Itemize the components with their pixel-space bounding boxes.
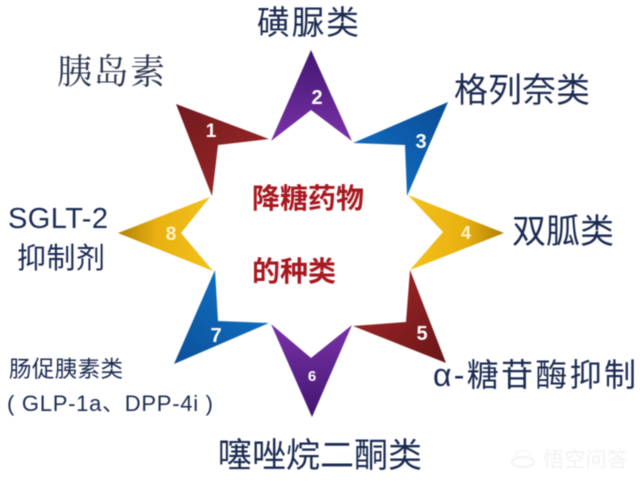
label 4: biguanides: 双胍类	[512, 213, 614, 251]
arrow 3: blue: 3	[415, 131, 427, 153]
label 1: insulin: 胰岛素	[57, 53, 165, 92]
arrow 4: yellow: 4	[461, 223, 471, 243]
center title	[252, 183, 364, 287]
arrow 5: dark red	[353, 270, 446, 363]
label 7: incretins: ( GLP-1a、DPP-4i )	[7, 391, 213, 416]
arrow 7: blue: 7	[210, 325, 222, 347]
arrow 3: blue	[353, 102, 448, 196]
label 3: glinides: 格列奈类	[454, 72, 590, 110]
arrow 8: yellow: 8	[166, 224, 176, 245]
label 2: sulfonylureas: 磺脲类	[257, 4, 359, 41]
arrow 6: purple: 6	[308, 368, 316, 385]
watermark: 悟空问答	[543, 449, 628, 472]
label 8: SGLT-2 inhibitors: 抑制剂	[17, 242, 105, 275]
label 7: incretins	[7, 357, 213, 416]
label 7: incretins: 肠促胰素类	[9, 357, 123, 382]
arrow 2: purple: 2	[311, 87, 323, 109]
arrow 4: yellow	[408, 195, 504, 270]
arrow 1: dark red: 1	[206, 121, 217, 142]
arrow 6: purple	[271, 324, 352, 417]
label 5: alpha-glucosidase inhibitors: α-糖苷酶抑制	[433, 357, 636, 393]
arrow 1: dark red	[176, 104, 269, 196]
center title: 的种类	[252, 256, 336, 287]
label 8: SGLT-2 inhibitors	[8, 203, 108, 275]
arrow 5: dark red: 5	[416, 323, 428, 345]
label 8: SGLT-2 inhibitors: SGLT-2	[8, 203, 108, 235]
center title: 降糖药物	[252, 183, 364, 214]
arrow 8: yellow	[118, 197, 213, 271]
arrow 2: purple	[271, 50, 352, 141]
arrow 7: blue	[174, 270, 269, 364]
label 6: thiazolidinediones: 噻唑烷二酮类	[218, 437, 422, 475]
